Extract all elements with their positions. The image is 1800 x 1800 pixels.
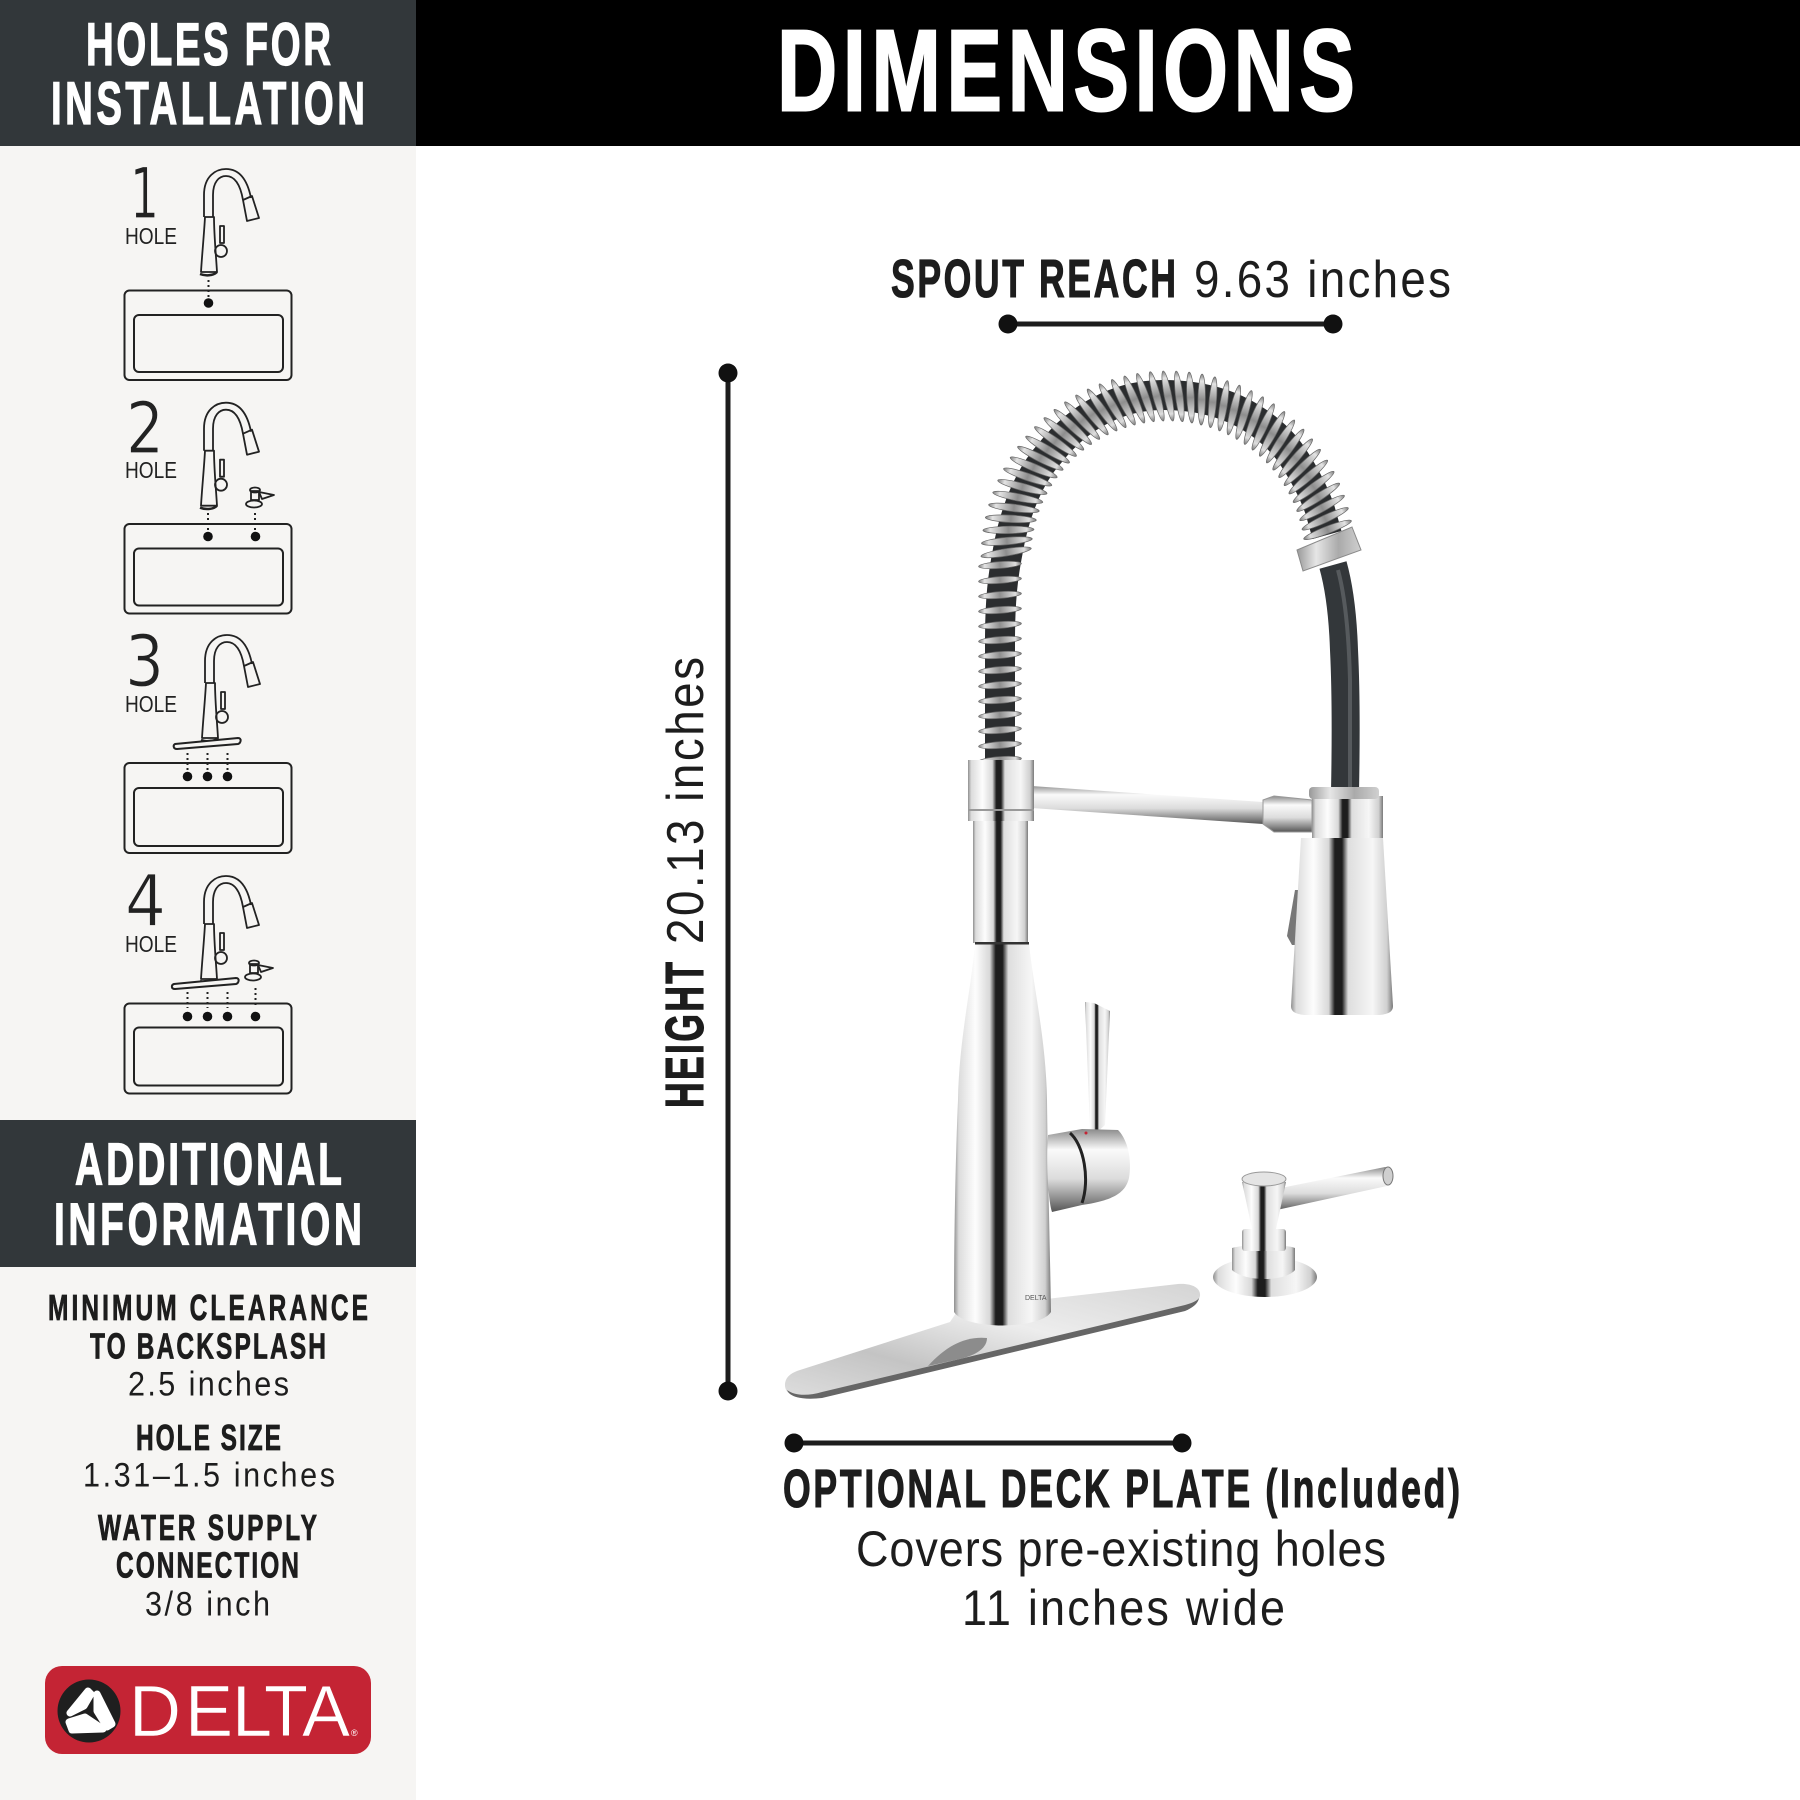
heading: additional information: [0, 1120, 416, 1267]
faucet spring: [978, 370, 1354, 765]
arrow: deck plate dimension line: [784, 1434, 1192, 1452]
label: optional deck plate: OPTIONAL DECK PLATE (Included): [783, 1459, 1460, 1519]
label: height: [655, 657, 715, 1108]
text block: hole size: HOLE SIZE: [136, 1417, 281, 1458]
faucet head collar: [1309, 787, 1383, 838]
icon: 4 hole diagram: [124, 860, 292, 1094]
label: optional deck plate: [783, 1459, 1460, 1637]
text block: minimum clearance: [48, 1287, 368, 1403]
text block: minimum clearance: 2.5 inches: [128, 1365, 289, 1403]
heading: holes for installation: HOLES FOR: [86, 10, 331, 78]
label: optional deck plate: Covers pre-existing holes: [856, 1522, 1386, 1578]
logo: Delta: [45, 1666, 371, 1754]
icon: 4 hole diagram: HOLE: [125, 931, 177, 957]
text block: minimum clearance: MINIMUM CLEARANCE: [48, 1287, 368, 1328]
faucet trigger: [1287, 890, 1299, 945]
icon: 1 hole diagram: 1: [130, 153, 159, 235]
heading: holes for installation: [0, 0, 416, 146]
logo: Delta: ®: [351, 1728, 358, 1738]
arrow: height dimension line: [718, 364, 738, 1400]
label: spout reach: 9.63 inches: [1194, 251, 1451, 309]
panel: left sidebar: [0, 0, 416, 1800]
icon: 2 hole diagram: [124, 387, 292, 614]
icon: 2 hole diagram: 2: [126, 387, 164, 470]
text block: minimum clearance: TO BACKSPLASH: [90, 1326, 326, 1367]
heading: holes for installation: INSTALLATION: [51, 69, 365, 137]
arrow: spout reach dimension line: [998, 314, 1342, 334]
faucet black hose: [1333, 565, 1350, 792]
icon: 3 hole diagram: [124, 620, 292, 853]
icon: 1 hole diagram: [124, 153, 292, 380]
faucet handle: [1047, 1002, 1130, 1212]
icon: 2 hole diagram: HOLE: [125, 457, 177, 483]
text block: water supply connection: [98, 1507, 317, 1623]
faucet arm: [1012, 785, 1263, 824]
faucet arm coupling: [1263, 796, 1312, 832]
faucet body: DELTA: [1025, 1295, 1047, 1302]
label: height: 20.13 inches: [657, 657, 715, 944]
label: spout reach: SPOUT REACH: [891, 249, 1176, 309]
soap dispenser: [1213, 1167, 1393, 1297]
label: spout reach: [891, 249, 1451, 309]
title bar: dimensions: [416, 0, 1800, 146]
icon: 1 hole diagram: HOLE: [125, 223, 177, 249]
text block: water supply connection: WATER SUPPLY: [98, 1507, 317, 1548]
title bar: dimensions: DIMENSIONS: [777, 7, 1355, 136]
logo: Delta: DELTA: [129, 1672, 350, 1752]
faucet spray head: [1291, 838, 1393, 1015]
faucet body: [954, 760, 1051, 1326]
text block: water supply connection: CONNECTION: [116, 1545, 299, 1586]
product: faucet: [785, 370, 1393, 1399]
icon: 4 hole diagram: 4: [125, 860, 166, 943]
heading: additional information: ADDITIONAL: [75, 1131, 342, 1197]
text block: hole size: 1.31–1.5 inches: [83, 1456, 335, 1494]
text block: hole size: [83, 1417, 335, 1494]
icon: 3 hole diagram: HOLE: [125, 691, 177, 717]
faucet deck plate: [785, 1284, 1200, 1399]
heading: additional information: INFORMATION: [54, 1191, 362, 1257]
label: height: HEIGHT: [655, 962, 715, 1108]
icon: 3 hole diagram: 3: [125, 620, 164, 703]
faucet spring cap: [1297, 527, 1361, 571]
text block: water supply connection: 3/8 inch: [145, 1585, 270, 1623]
label: optional deck plate: 11 inches wide: [962, 1581, 1285, 1637]
